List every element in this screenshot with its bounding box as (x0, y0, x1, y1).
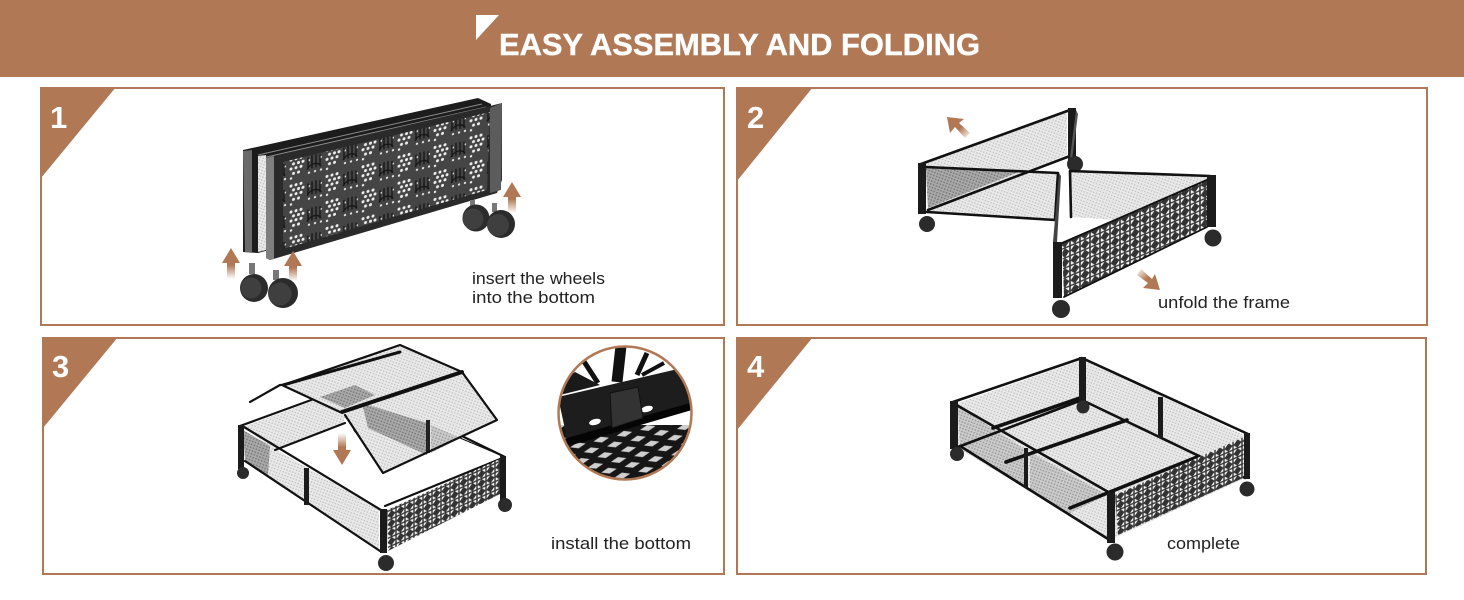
arrow up middle (284, 251, 302, 281)
step badge 3: 3 (52, 349, 69, 384)
frame with lid (237, 345, 512, 571)
arrow down (333, 433, 351, 465)
step badge 4 (736, 337, 813, 430)
title: EASY ASSEMBLY AND FOLDING (499, 27, 980, 62)
caption step 1 (472, 270, 605, 307)
arrow up right (503, 182, 521, 213)
wheels right pair (462, 200, 515, 238)
icon: header corner triangle (476, 15, 499, 40)
caption step 3: install the bottom (551, 535, 691, 553)
panel: step 2 unfold frame (736, 87, 1427, 325)
step badge 1: 1 (50, 100, 67, 135)
unfolding frame (918, 108, 1222, 318)
panel: step 4 complete (736, 337, 1426, 574)
arrow down-right (1137, 269, 1160, 290)
folded frame (243, 98, 502, 260)
step badge 2 (736, 87, 813, 181)
step badge 2: 2 (747, 100, 764, 135)
arrow up-left (947, 117, 970, 138)
step badge 3 (42, 337, 118, 428)
panel: step 1 insert wheels (40, 87, 724, 325)
wheels left pair (240, 263, 298, 308)
step badge 1 (40, 87, 116, 178)
caption step 2: unfold the frame (1158, 294, 1290, 312)
assembled frame (950, 357, 1254, 560)
panel: step 3 install bottom (42, 337, 724, 574)
caption step 1: into the bottom (472, 289, 595, 307)
lid (283, 345, 462, 412)
detail circle (557, 345, 693, 481)
caption step 4: complete (1167, 535, 1240, 553)
header banner (0, 0, 1464, 77)
caption step 1: insert the wheels (472, 270, 605, 288)
arrow up left (222, 248, 240, 279)
step badge 4: 4 (747, 349, 765, 384)
